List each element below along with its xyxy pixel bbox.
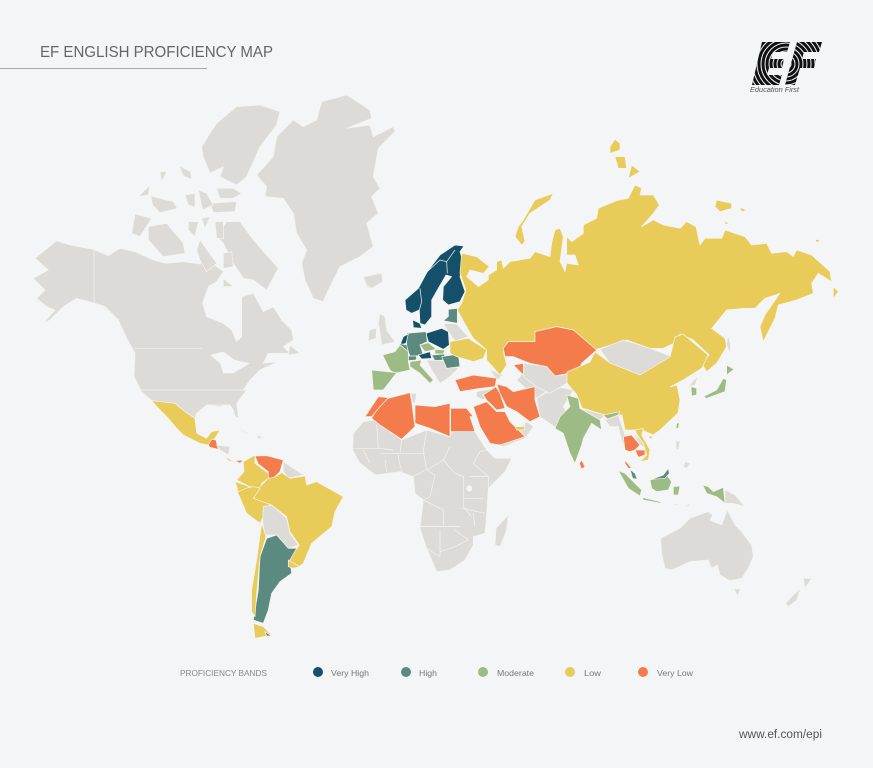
Europe, Middle East and North Africa <box>363 245 573 447</box>
legend: proficiency bands: PROFICIENCY BANDS <box>180 668 267 678</box>
North America and Greenland <box>33 95 395 410</box>
legend: proficiency bands <box>180 667 694 678</box>
legend: proficiency bands: Low <box>584 668 602 678</box>
Australia and New Zealand <box>661 510 812 607</box>
legend: proficiency bands: Moderate <box>497 668 534 678</box>
legend: proficiency bands: Very High <box>331 668 369 678</box>
legend: proficiency bands: Very Low <box>657 668 694 678</box>
logo: EF Education First <box>750 42 822 92</box>
China <box>567 334 708 435</box>
world map <box>33 95 838 638</box>
legend: proficiency bands: High <box>419 668 437 678</box>
Russia and Central Asia <box>450 139 838 398</box>
Africa <box>353 420 512 572</box>
title: EF ENGLISH PROFICIENCY MAP <box>40 44 273 61</box>
South and South-East Asia <box>555 387 745 507</box>
Latin America <box>140 390 343 638</box>
website url: www.ef.com/epi <box>738 729 822 741</box>
logo: EF Education First: Education First <box>750 85 800 94</box>
